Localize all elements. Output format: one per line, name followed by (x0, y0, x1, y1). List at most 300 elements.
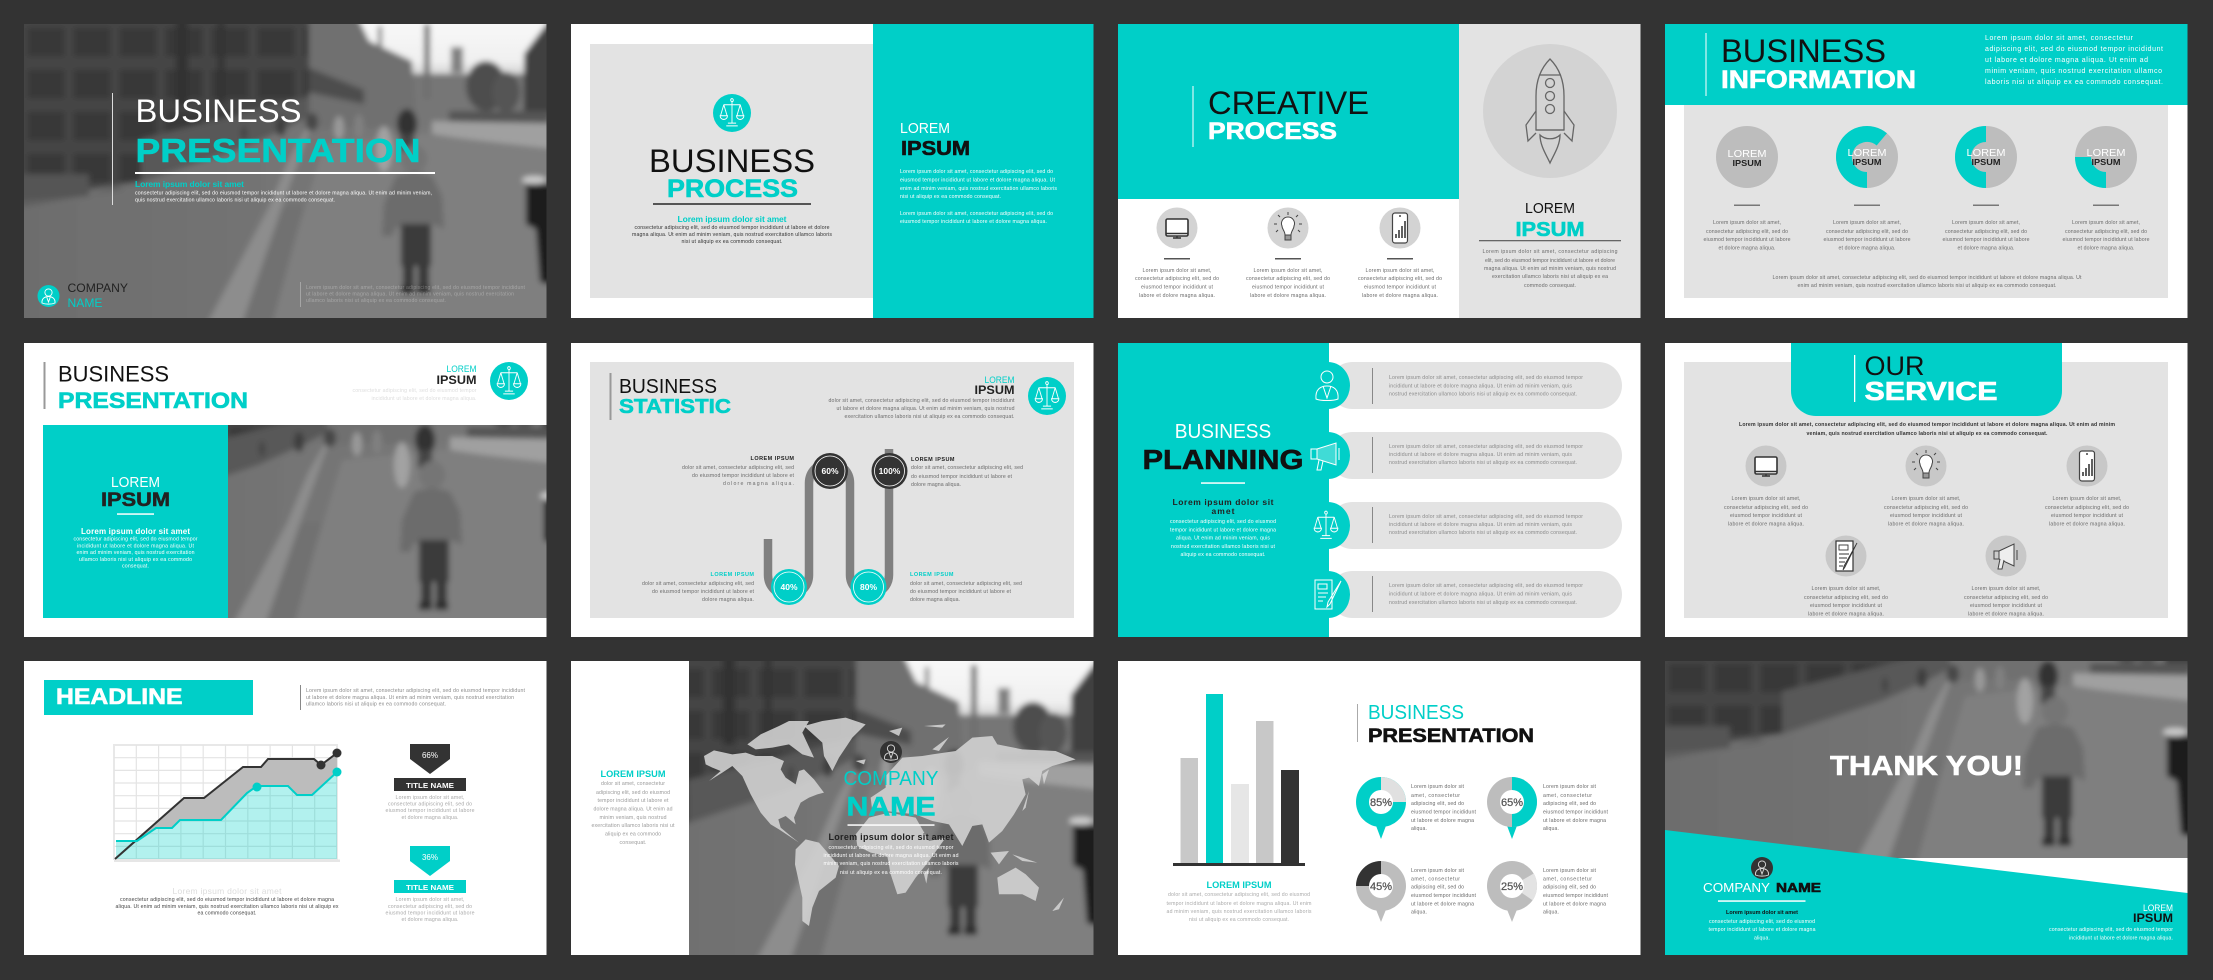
header note: Lorem ipsum dolor sit amet, consectetur adipiscing elit, sed do eiusmod tempor incididunt (306, 688, 526, 694)
row 1: nostrud exercitation ullamco laboris nisi ut aliquip ex ea commodo consequat. (1389, 392, 1577, 398)
service: monitor (1724, 446, 1808, 528)
item 4: consectetur adipiscing elit, sed do (2065, 229, 2147, 235)
snake line chart (768, 449, 889, 596)
left text: adipiscing elit, sed do eiusmod (596, 790, 670, 796)
item 2: eiusmod tempor incididunt ut labore (1824, 237, 1911, 243)
donut text 45%: adipiscing elit, sed do (1411, 884, 1464, 890)
icon: scales (490, 362, 528, 400)
heading: information: INFORMATION (1721, 66, 1916, 94)
item 1: LOREM (1728, 148, 1766, 160)
faint footer text: ut labore et dolore magna aliqua. Ut enim ad minim veniam, quis nostrud exercitation (306, 292, 514, 298)
grey panel (590, 44, 873, 298)
donut text 85%: aliqua. (1411, 826, 1427, 832)
donut text 25%: Lorem ipsum dolor sit (1543, 868, 1597, 874)
heading: creative: CREATIVE (1208, 85, 1369, 121)
feature: bulb: consectetur adipiscing elit, sed do (1246, 276, 1330, 282)
panel text (900, 169, 1057, 225)
left text: aliqua. (1754, 936, 1770, 942)
row 2: nostrud exercitation ullamco laboris nisi ut aliquip ex ea commodo consequat. (1389, 460, 1577, 466)
header text: Lorem ipsum dolor sit amet, consectetur (1985, 35, 2134, 42)
service: bulb: consectetur adipiscing elit, sed do (1884, 505, 1968, 511)
item 2: et dolore magna aliqua. (1838, 246, 1896, 252)
marker 100%: 100% (879, 466, 901, 476)
grey panel (1684, 362, 2168, 618)
heading: service: SERVICE (1864, 376, 1998, 406)
service: bulb: eiusmod tempor incididunt ut (1890, 513, 1963, 519)
left text: minim veniam, quis nostrud (600, 815, 667, 821)
panel subtitle: amet (1212, 506, 1235, 516)
panel text: aliquip ex ea commodo consequat. (1180, 552, 1266, 558)
badge text 2: consectetur adipiscing elit, sed do (388, 904, 472, 910)
donut text 25% (1543, 868, 1609, 916)
service: megaphone: Lorem ipsum dolor sit amet, (1972, 586, 2040, 592)
right text (2049, 927, 2173, 942)
title divider (1192, 86, 1194, 147)
slide background (571, 661, 1094, 955)
block text: consectetur adipiscing elit, sed do eiusmod tempor (74, 536, 198, 542)
panel text: nostrud exercitation ullamco laboris nisi ut (1171, 544, 1276, 550)
lorem label: LOREM (111, 475, 160, 491)
donut text 25%: amet, consectetur (1543, 876, 1592, 882)
item 3: Lorem ipsum dolor sit amet, (1952, 220, 2020, 226)
body text: nisi ut aliquip ex ea commodo consequat. (682, 239, 782, 245)
white rule (848, 824, 934, 826)
marker 60%: 60% (821, 466, 839, 476)
item 4 (2062, 126, 2150, 252)
chart text: nisi ut aliquip ex ea commodo consequat. (1189, 917, 1289, 923)
item 3: eiusmod tempor incididunt ut labore (1942, 237, 2030, 243)
slide 4: business information (1665, 24, 2188, 318)
note bottom left: dolor sit amet, consectetur adipiscing elit, sed (642, 581, 754, 587)
name label: NAME (68, 298, 103, 310)
left label: LOREM IPSUM (600, 769, 666, 779)
item 1 (1704, 126, 1791, 252)
slide 1: business presentation cover (24, 24, 546, 318)
overlay text: nisi ut aliquip ex ea commodo consequat. (840, 870, 942, 876)
lorem label: LOREM (984, 375, 1014, 385)
service: megaphone (1964, 536, 2048, 618)
item 1: consectetur adipiscing elit, sed do (1706, 229, 1788, 235)
panel text: enim ad minim veniam, quis nostrud exercitation ullamco laboris (900, 186, 1057, 192)
overlay text: consectetur adipiscing elit, sed do eiusmod tempor (828, 845, 954, 851)
note top left (682, 456, 795, 487)
heading: business: BUSINESS (619, 376, 717, 398)
row 3: nostrud exercitation ullamco laboris nisi ut aliquip ex ea commodo consequat. (1389, 530, 1577, 536)
slide background (571, 343, 1094, 637)
block text: incididunt ut labore et dolore magna aliqua. Ut (77, 544, 195, 550)
row 4: incididunt ut labore et dolore magna aliqua. Ut enim ad minim veniam, quis (1389, 592, 1572, 598)
item 4: LOREM (2086, 147, 2126, 159)
note bottom right (910, 572, 1022, 603)
badge text 1: Lorem ipsum dolor sit amet, (396, 795, 464, 801)
row 1 (1306, 362, 1622, 409)
donut 85% (1356, 777, 1406, 839)
service: document (1804, 536, 1888, 618)
feature: bulb (1246, 208, 1330, 299)
panel text: Lorem ipsum dolor sit amet, consectetur adipiscing elit, sed do (900, 169, 1053, 175)
slide background (1665, 24, 2188, 318)
side text: magna aliqua. Ut enim ad minim veniam, quis nostrud (1484, 266, 1616, 272)
feature: monitor: consectetur adipiscing elit, sed do (1135, 276, 1219, 282)
heading: presentation: PRESENTATION (1368, 726, 1534, 747)
note bottom right: dolore magna aliqua. (910, 597, 960, 603)
left text: tempor incididunt ut labore et dolore magna (1708, 927, 1816, 933)
slide 6: business statistic (571, 343, 1094, 637)
left text: dolore magna aliqua. Ut enim ad (594, 806, 673, 812)
footer text: enim ad minim veniam, quis nostrud exercitation ullamco laboris nisi ut aliquip ex ea commodo consequat. (1798, 283, 2056, 289)
item 1: eiusmod tempor incididunt ut labore (1704, 237, 1791, 243)
heading: presentation: PRESENTATION (136, 132, 420, 169)
service: document: eiusmod tempor incididunt ut (1810, 603, 1883, 609)
item 2: consectetur adipiscing elit, sed do (1826, 229, 1908, 235)
note bottom right: dolor sit amet, consectetur adipiscing elit, sed (910, 581, 1022, 587)
donut text 85%: Lorem ipsum dolor sit (1411, 784, 1465, 790)
donut text 85%: ut labore et dolore magna (1411, 818, 1474, 824)
heading: business: BUSINESS (1721, 33, 1886, 69)
donut text 85%: eiusmod tempor incididunt (1411, 810, 1477, 816)
feature: monitor: labore et dolore magna aliqua. (1139, 293, 1215, 299)
white dash (1201, 482, 1245, 484)
service: monitor: labore et dolore magna aliqua. (1728, 522, 1804, 528)
street photo (689, 661, 1094, 955)
panel subtitle (1172, 497, 1274, 516)
thank you heading: THANK YOU! (1830, 750, 2023, 781)
item 3: LOREM (1966, 147, 2006, 159)
chart text: tempor incididunt ut labore et dolore magna aliqua. Ut enim (1166, 901, 1312, 907)
feature: phone (1358, 208, 1442, 299)
item 1: IPSUM (1732, 158, 1762, 168)
donut 65%: 65% (1501, 797, 1523, 809)
service: phone (2045, 446, 2129, 528)
note top right: do eiusmod tempor incididunt ut labore et (911, 474, 1013, 480)
name heading: NAME (846, 792, 936, 822)
company heading: COMPANY (844, 768, 938, 790)
header text: ut labore et dolore magna aliqua. Ut enim ad (1985, 57, 2148, 64)
chart caption: Lorem ipsum dolor sit amet (172, 886, 282, 896)
company logo (880, 741, 902, 763)
title name teal (394, 880, 466, 893)
teal side panel (1118, 343, 1329, 637)
white rule (135, 172, 435, 174)
feature: monitor: eiusmod tempor incididunt ut (1141, 284, 1214, 290)
donut 45%: 45% (1370, 881, 1392, 893)
item 2: IPSUM (1852, 157, 1882, 167)
header text: laboris nisi ut aliquip ex ea commodo consequat. (1985, 79, 2163, 86)
slide 12: thank you (1665, 661, 2188, 955)
title divider (610, 373, 612, 420)
item 3: IPSUM (1972, 157, 2000, 167)
feature: phone: labore et dolore magna aliqua. (1362, 293, 1438, 299)
faint text (352, 388, 477, 402)
item 2 (1824, 126, 1911, 252)
badge text 2 (386, 897, 475, 923)
faint footer text: Lorem ipsum dolor sit amet, consectetur adipiscing elit, sed do eiusmod tempor incididunt (306, 285, 526, 291)
note top left: dolore magna aliqua. (723, 481, 794, 487)
donut 45% (1356, 861, 1406, 922)
icon: scales (713, 94, 751, 132)
teal header (1665, 24, 2188, 105)
panel text: Lorem ipsum dolor sit amet, consectetur adipiscing elit, sed do (900, 211, 1053, 217)
row 1: incididunt ut labore et dolore magna aliqua. Ut enim ad minim veniam, quis (1389, 384, 1572, 390)
slide 11: bar chart and donuts (1118, 661, 1640, 955)
service: megaphone: consectetur adipiscing elit, sed do (1964, 595, 2048, 601)
note bottom left: do eiusmod tempor incididunt ut labore et (652, 589, 755, 595)
note bottom right: LOREM IPSUM (910, 572, 954, 578)
donut 25%: 25% (1501, 881, 1523, 893)
row 4: Lorem ipsum dolor sit amet, consectetur adipiscing elit, sed do eiusmod tempor (1389, 583, 1583, 589)
header note (300, 685, 526, 710)
slide background (1118, 661, 1640, 955)
faint footer text: ullamco laboris nisi ut aliquip ex ea commodo consequat. (306, 298, 446, 304)
badge 36%: 36% (422, 853, 438, 862)
row 3: incididunt ut labore et dolore magna aliqua. Ut enim ad minim veniam, quis (1389, 522, 1572, 528)
teal block (43, 425, 228, 618)
feature: monitor: Lorem ipsum dolor sit amet, (1142, 268, 1212, 274)
panel subtitle: Lorem ipsum dolor sit (1172, 497, 1274, 507)
block text: consequat. (122, 564, 149, 570)
header text (1985, 35, 2163, 86)
note top left: LOREM IPSUM (750, 456, 794, 462)
badge 66%: 66% (422, 751, 438, 760)
right text: incididunt ut labore et dolore magna aliqua. (2069, 936, 2173, 942)
icon: rocket (1483, 44, 1617, 178)
world map (704, 718, 1076, 926)
subtitle: Lorem ipsum dolor sit amet (1726, 910, 1798, 916)
left text (592, 781, 675, 846)
body text: magna aliqua. Ut enim ad minim veniam, quis nostrud exercitation ullamco laboris (632, 232, 832, 238)
block text (74, 536, 198, 570)
service: phone: eiusmod tempor incididunt ut (2051, 513, 2124, 519)
donut text 85%: adipiscing elit, sed do (1411, 801, 1464, 807)
header text: dolor sit amet, consectetur adipiscing elit, sed do eiusmod tempor incididunt (828, 398, 1015, 404)
item 1: et dolore magna aliqua. (1718, 246, 1776, 252)
heading: business: BUSINESS (1368, 702, 1464, 724)
slide background (1118, 343, 1640, 637)
heading: business: BUSINESS (1175, 420, 1271, 443)
body text (135, 190, 432, 204)
row 1: Lorem ipsum dolor sit amet, consectetur adipiscing elit, sed do eiusmod tempor (1389, 375, 1583, 381)
street photo background (24, 24, 546, 318)
chart text: consectetur adipiscing elit, sed do eiusmod tempor incididunt ut labore et dolore magna (120, 897, 334, 903)
service: monitor: Lorem ipsum dolor sit amet, (1732, 496, 1800, 502)
header text: exercitation ullamco laboris nisi ut aliquip ex ea commodo consequat. (844, 414, 1014, 420)
donut text 45%: aliqua. (1411, 910, 1427, 916)
donut text 45%: ut labore et dolore magna (1411, 902, 1474, 908)
panel text: tempor incididunt ut labore et dolore magna (1170, 528, 1276, 534)
chart text: aliqua. Ut enim ad minim veniam, quis nostrud exercitation ullamco laboris nisi ut aliquip ex (116, 904, 339, 910)
item 4: eiusmod tempor incididunt ut labore (2062, 237, 2150, 243)
badge text 1: eiusmod tempor incididunt ut labore (386, 808, 475, 814)
title divider (1854, 355, 1855, 402)
left text: exercitation ullamco laboris nisi ut (592, 823, 675, 829)
feature: phone: eiusmod tempor incididunt ut (1364, 284, 1437, 290)
note top right (911, 457, 1023, 488)
left text: dolor sit amet, consectetur (601, 781, 665, 787)
title divider (1706, 33, 1707, 96)
icon: scales (1028, 377, 1066, 415)
marker 40%: 40% (780, 582, 798, 592)
donut text 65%: amet, consectetur (1543, 793, 1592, 799)
feature: bulb: eiusmod tempor incididunt ut (1252, 284, 1325, 290)
lorem label: LOREM (1525, 201, 1575, 217)
item 4: IPSUM (2092, 157, 2120, 167)
badge 66% (410, 744, 450, 774)
slide 8: our service (1665, 343, 2188, 637)
subtitle: Lorem ipsum dolor sit amet (828, 832, 954, 842)
side text (1482, 249, 1618, 289)
title divider (112, 93, 113, 205)
heading: planning: PLANNING (1142, 444, 1304, 475)
note top right: LOREM IPSUM (911, 457, 955, 463)
chart text: dolor sit amet, consectetur adipiscing elit, sed do eiusmod (1168, 892, 1310, 898)
service: document: Lorem ipsum dolor sit amet, (1812, 586, 1880, 592)
side text: commodo consequat. (1524, 283, 1576, 289)
left text: consectetur adipiscing elit, sed do eiusmod (1709, 919, 1815, 925)
faint text: consectetur adipiscing elit, sed do eiusmod tempor (352, 388, 477, 394)
note top right: dolor sit amet, consectetur adipiscing elit, sed (911, 465, 1023, 471)
headline band (44, 680, 253, 715)
item 2: LOREM (1848, 147, 1886, 159)
company label: COMPANY (68, 283, 128, 295)
body text: consectetur adipiscing elit, sed do eiusmod tempor incididunt ut labore et dolore magna aliqua. Ut enim ad minim veniam, (135, 190, 432, 196)
panel text: aliqua. Ut enim ad minim veniam, quis (1176, 536, 1270, 542)
slide background (1665, 661, 2188, 955)
item 4: Lorem ipsum dolor sit amet, (2072, 220, 2140, 226)
marker 40% (771, 569, 807, 605)
heading: process: PROCESS (667, 175, 798, 203)
item 2: Lorem ipsum dolor sit amet, (1833, 220, 1901, 226)
ipsum label: IPSUM (2133, 911, 2173, 925)
left text: consequat. (620, 840, 646, 846)
heading: business: BUSINESS (58, 362, 169, 386)
slide background (1118, 24, 1640, 318)
panel text: consectetur adipiscing elit, sed do eiusmod (1170, 519, 1276, 525)
note top left: do eiusmod tempor incididunt ut labore et (692, 473, 795, 479)
donut text 65%: eiusmod tempor incididunt (1543, 810, 1609, 816)
title divider (44, 362, 46, 409)
teal header (1118, 24, 1459, 199)
item 3 (1942, 126, 2030, 252)
overlay text: incididunt ut labore et dolore magna aliqua. Ut enim ad (824, 853, 959, 859)
slide 9: headline with area chart (24, 661, 546, 955)
heading: business: BUSINESS (136, 93, 302, 129)
donut text 65%: Lorem ipsum dolor sit (1543, 784, 1597, 790)
slide background (1665, 343, 2188, 637)
badge 36% (410, 846, 450, 876)
donut text 65%: adipiscing elit, sed do (1543, 801, 1596, 807)
donut text 65% (1543, 784, 1609, 832)
donut text 25%: eiusmod tempor incididunt (1543, 893, 1609, 899)
heading: our: OUR (1864, 351, 1924, 381)
name label: NAME (1776, 880, 1821, 895)
intro text: Lorem ipsum dolor sit amet, consectetur adipiscing elit, sed do eiusmod tempor incididunt ut labore et dolore magna aliqua. Ut enim ad minim (1739, 422, 2115, 428)
headline text: HEADLINE (56, 684, 182, 709)
slide background (571, 24, 1094, 318)
item 1: Lorem ipsum dolor sit amet, (1713, 220, 1781, 226)
service: megaphone: labore et dolore magna aliqua. (1968, 612, 2044, 618)
slide 3: creative process (1118, 24, 1640, 318)
intro text: veniam, quis nostrud exercitation ullamco laboris nisi ut aliquip ex ea commodo consequat. (1806, 431, 2048, 437)
slide 10: world map (571, 661, 1094, 955)
chart text (116, 897, 339, 916)
header text: minim veniam, quis nostrud exercitation ullamco (1985, 68, 2162, 75)
chart text (1166, 892, 1312, 923)
company logo (1751, 857, 1773, 879)
row 3: Lorem ipsum dolor sit amet, consectetur adipiscing elit, sed do eiusmod tempor (1389, 514, 1583, 520)
area chart (114, 745, 342, 862)
footer text: Lorem ipsum dolor sit amet, consectetur adipiscing elit, sed do eiusmod tempor incididunt ut labore et dolore magna aliqua. Ut (1772, 275, 2082, 281)
block text: ullamco laboris nisi ut aliquip ex ea commodo (79, 557, 192, 563)
lorem label: LOREM (900, 120, 950, 137)
feature: monitor (1135, 208, 1219, 299)
title name dark (394, 778, 466, 791)
body text: quis nostrud exercitation ullamco laboris nisi ut aliquip ex ea commodo consequat. (135, 198, 335, 204)
faint footer text (300, 282, 526, 307)
donut text 45%: Lorem ipsum dolor sit (1411, 868, 1465, 874)
block subtitle: Lorem ipsum dolor sit amet (81, 527, 190, 536)
slide 5: business presentation with photo (24, 343, 546, 637)
donut 65% (1487, 777, 1537, 839)
teal diagonal band (1665, 830, 2188, 955)
chart text: ea commodo consequat. (198, 910, 256, 916)
donut 85%: 85% (1370, 797, 1392, 809)
service: bulb (1884, 446, 1968, 528)
ipsum label: IPSUM (974, 383, 1014, 397)
white dash (1718, 900, 1806, 902)
donut text 25%: adipiscing elit, sed do (1543, 884, 1596, 890)
grey panel (590, 362, 1074, 618)
slide background (24, 661, 546, 955)
header note: ullamco laboris nisi ut aliquip ex ea commodo consequat. (306, 702, 446, 708)
title divider (1357, 704, 1358, 742)
badge text 1 (386, 795, 475, 821)
ipsum label: IPSUM (436, 373, 476, 387)
note bottom right: do eiusmod tempor incididunt ut labore et (910, 589, 1012, 595)
badge text 1: et dolore magna aliqua. (402, 815, 458, 821)
dark rule (653, 203, 811, 205)
white dash (117, 513, 154, 515)
teal title tab (1791, 343, 2062, 416)
item 3: consectetur adipiscing elit, sed do (1945, 229, 2027, 235)
intro text (1739, 422, 2115, 437)
panel text (1170, 519, 1276, 558)
overlay text (824, 845, 959, 876)
header text: ut labore et dolore magna aliqua. Ut enim ad minim veniam, quis nostrud (836, 406, 1015, 412)
lorem label: LOREM (2143, 903, 2173, 913)
company logo (38, 285, 60, 307)
note bottom left (642, 572, 755, 603)
service: phone: consectetur adipiscing elit, sed do (2045, 505, 2129, 511)
street photo (228, 425, 546, 618)
row 2 (1306, 432, 1622, 479)
left text: aliquip ex ea commodo (605, 832, 661, 838)
marker 60% (812, 453, 848, 489)
donut text 45%: amet, consectetur (1411, 876, 1460, 882)
body text: consectetur adipiscing elit, sed do eiusmod tempor incididunt ut labore et dolore (634, 225, 830, 231)
badge text 2: et dolore magna aliqua. (402, 917, 458, 923)
side text: elit, sed do eiusmod tempor incididunt ut labore et dolore (1485, 258, 1615, 264)
badge text 1: consectetur adipiscing elit, sed do (388, 802, 472, 808)
note bottom left: LOREM IPSUM (710, 572, 754, 578)
grey side panel (1459, 24, 1640, 318)
header note: ut labore et dolore magna aliqua. Ut enim ad minim veniam, quis nostrud exercitation (306, 695, 514, 701)
slide 7: business planning (1118, 343, 1640, 637)
heading: statistic: STATISTIC (619, 396, 731, 418)
row 4: nostrud exercitation ullamco laboris nisi ut aliquip ex ea commodo consequat. (1389, 600, 1577, 606)
donut 25% (1487, 861, 1537, 922)
feature: bulb: Lorem ipsum dolor sit amet, (1254, 268, 1322, 274)
street photo (1665, 661, 2188, 858)
